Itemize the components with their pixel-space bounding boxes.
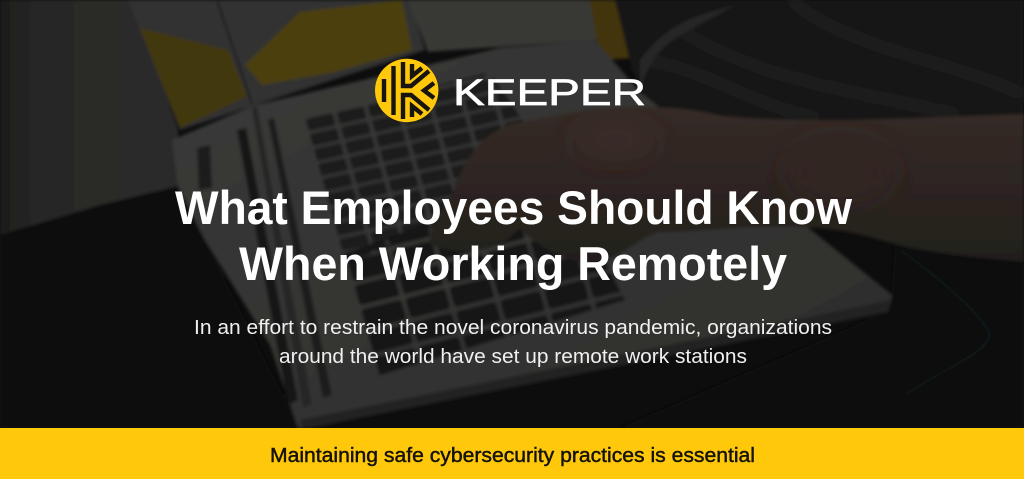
laptop base — [172, 40, 892, 428]
yellow screen reflection left — [140, 28, 247, 128]
logo wordmark: KEEPER — [453, 72, 646, 113]
keyboard lower — [340, 175, 625, 376]
title line 1: What Employees Should Know — [175, 181, 852, 234]
title — [175, 181, 852, 290]
sweater top right — [615, 0, 1024, 122]
hand — [430, 107, 1024, 262]
yellow strip behind laptop — [590, 0, 632, 60]
yellow footer banner — [0, 428, 1024, 479]
left jeans — [0, 186, 300, 428]
logo: Keeper — [375, 59, 646, 122]
title line 2: When Working Remotely — [239, 237, 787, 290]
cloth on the left — [0, 0, 178, 235]
side ports — [197, 145, 212, 190]
knuckle highlight — [575, 128, 655, 152]
speaker and hinge slots — [237, 128, 298, 405]
laptop screen — [128, 0, 425, 130]
subtitle line 1: In an effort to restrain the novel coronavirus pandemic, organizations — [194, 317, 832, 339]
subtitle line 2: around the world have set up remote work stations — [279, 346, 747, 368]
laptop front edge shadow — [300, 300, 892, 428]
banner text: Maintaining safe cybersecurity practices is essential — [270, 445, 755, 467]
subtitle — [194, 317, 832, 368]
logo icon — [375, 59, 438, 122]
notebook at top — [408, 0, 602, 52]
right jeans — [620, 240, 1024, 428]
keyboard upper — [305, 72, 560, 265]
yellow screen reflection right — [245, 0, 412, 85]
screen hinge line — [217, 0, 252, 104]
